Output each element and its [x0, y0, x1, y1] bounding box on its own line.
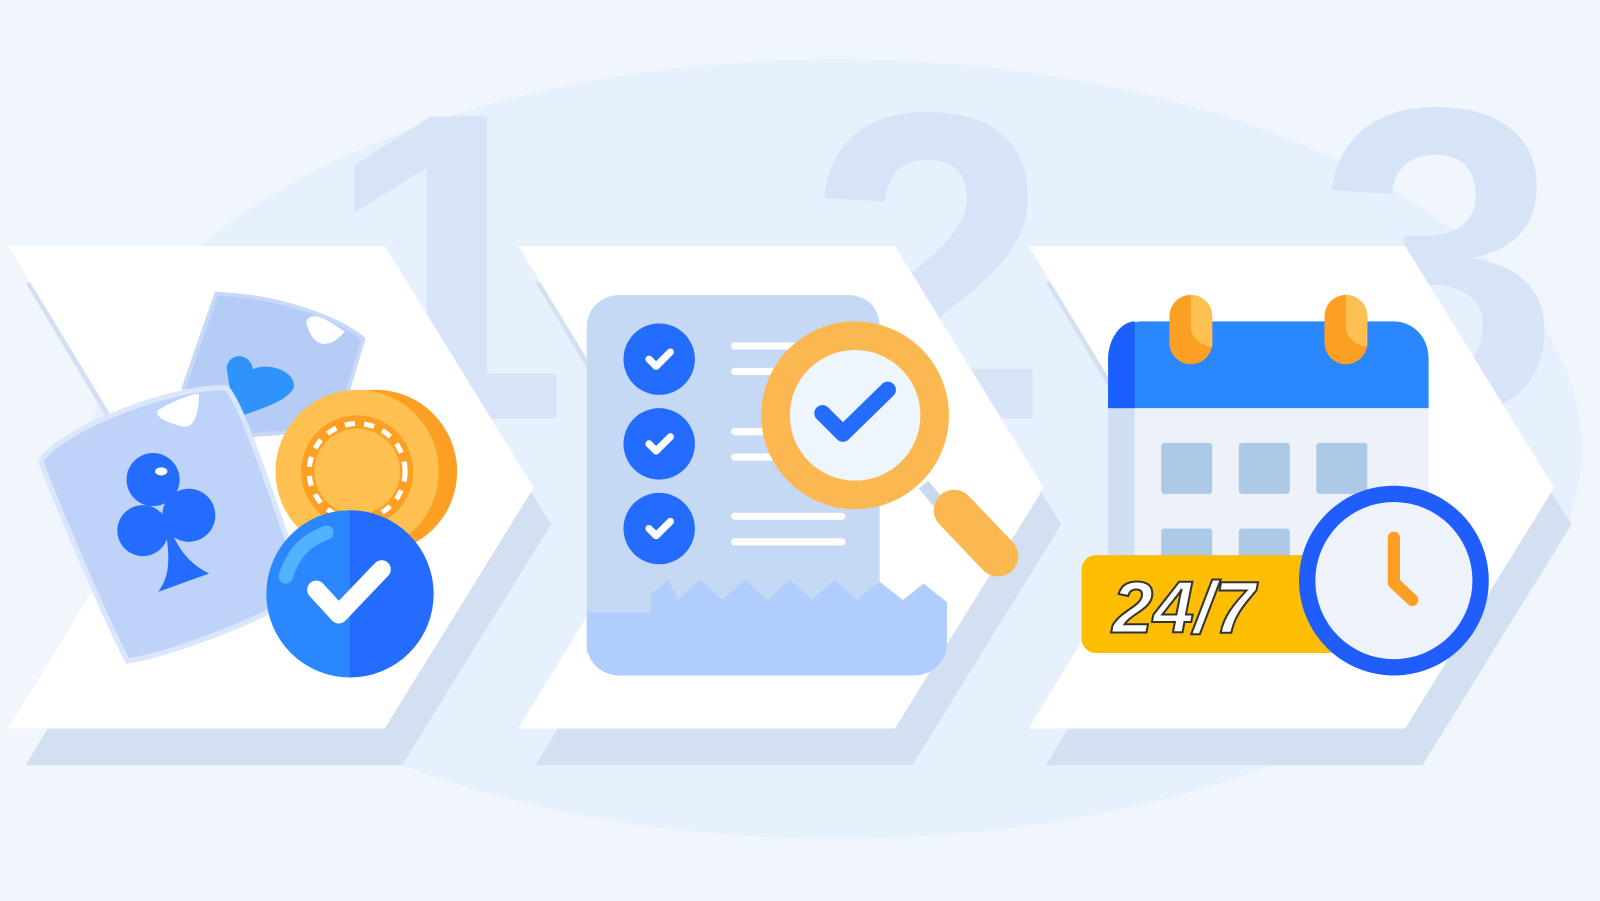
icon: front card with club — [41, 388, 306, 661]
icon: calendar — [1108, 295, 1429, 587]
icon: back card — [184, 294, 363, 439]
number 2: 2 — [806, 21, 1050, 511]
icon: document — [587, 295, 947, 675]
icon: check badge — [266, 510, 434, 678]
badge: 24/7: 24/7 — [1110, 566, 1258, 649]
panel 1: cards and chip — [8, 246, 551, 765]
icon: poker chip — [276, 390, 457, 553]
badge: 24/7 — [1082, 555, 1342, 653]
panel 3: calendar and clock — [1029, 246, 1571, 765]
icon: magnifier — [761, 321, 998, 556]
number 3: 3 — [1316, 16, 1560, 506]
number 1: 1 — [324, 21, 569, 511]
icon: clock — [1299, 486, 1489, 675]
panel 2: checklist and magnifier — [518, 246, 1061, 765]
